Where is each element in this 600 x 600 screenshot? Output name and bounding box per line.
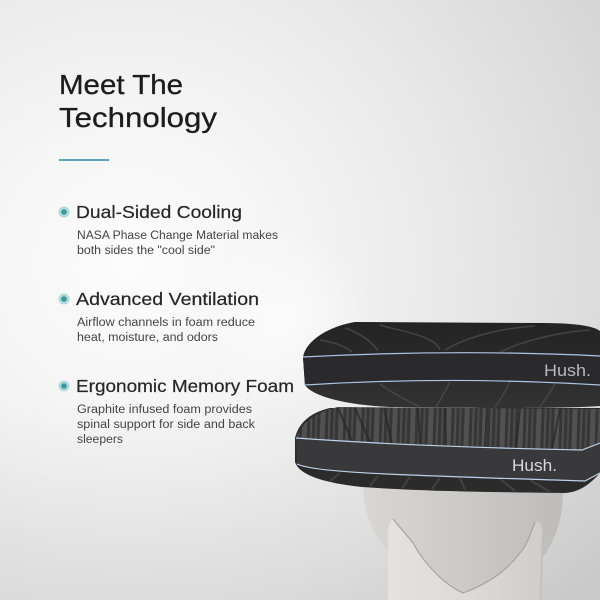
description: cooling: both sides the "cool side" (77, 245, 215, 257)
heading: Dual-Sided Cooling: Dual-Sided Cooling (76, 202, 242, 222)
accent divider (59, 159, 109, 161)
description: cooling (77, 230, 278, 257)
lower pillow folds (338, 408, 560, 449)
lower pillow logo: Hush. (512, 456, 557, 475)
description: memory foam (77, 404, 255, 446)
feature: Ergonomic Memory Foam (58, 376, 294, 446)
title (59, 69, 217, 133)
vase leg shadow line (393, 519, 535, 593)
lower pillow underside folds (330, 473, 550, 492)
lower pillow piping (296, 438, 600, 481)
feature: Dual-Sided Cooling (58, 202, 278, 257)
heading: Ergonomic Memory Foam: Ergonomic Memory Foam (76, 376, 294, 396)
title: Meet The (59, 69, 183, 100)
heading: Advanced Ventilation: Advanced Ventilation (76, 289, 259, 309)
vase bowl (363, 484, 563, 600)
icon: bullet 3 (58, 380, 70, 392)
description: memory foam: spinal support for side and back (77, 419, 255, 431)
title: Technology (59, 102, 217, 133)
description: memory foam: Graphite infused foam provides (77, 404, 252, 416)
lower pillow side band (296, 438, 600, 481)
description: ventilation: Airflow channels in foam reduce (77, 317, 255, 329)
vase legs (388, 519, 542, 600)
upper pillow texture (320, 325, 590, 407)
feature: Advanced Ventilation (58, 289, 259, 344)
description: memory foam: sleepers (77, 434, 123, 446)
upper pillow logo: Hush. (544, 361, 591, 380)
upper pillow side band (303, 353, 600, 386)
description: cooling: NASA Phase Change Material makes (77, 230, 278, 242)
icon: bullet 1 (58, 206, 70, 218)
pillow: lower (295, 407, 600, 493)
lower pillow ribbed top (296, 407, 600, 450)
description: ventilation: heat, moisture, and odors (77, 332, 218, 344)
vase (363, 484, 563, 600)
upper pillow piping (303, 353, 600, 385)
pillow: upper (303, 322, 600, 408)
icon: bullet 2 (58, 294, 70, 304)
description: ventilation (77, 317, 255, 344)
